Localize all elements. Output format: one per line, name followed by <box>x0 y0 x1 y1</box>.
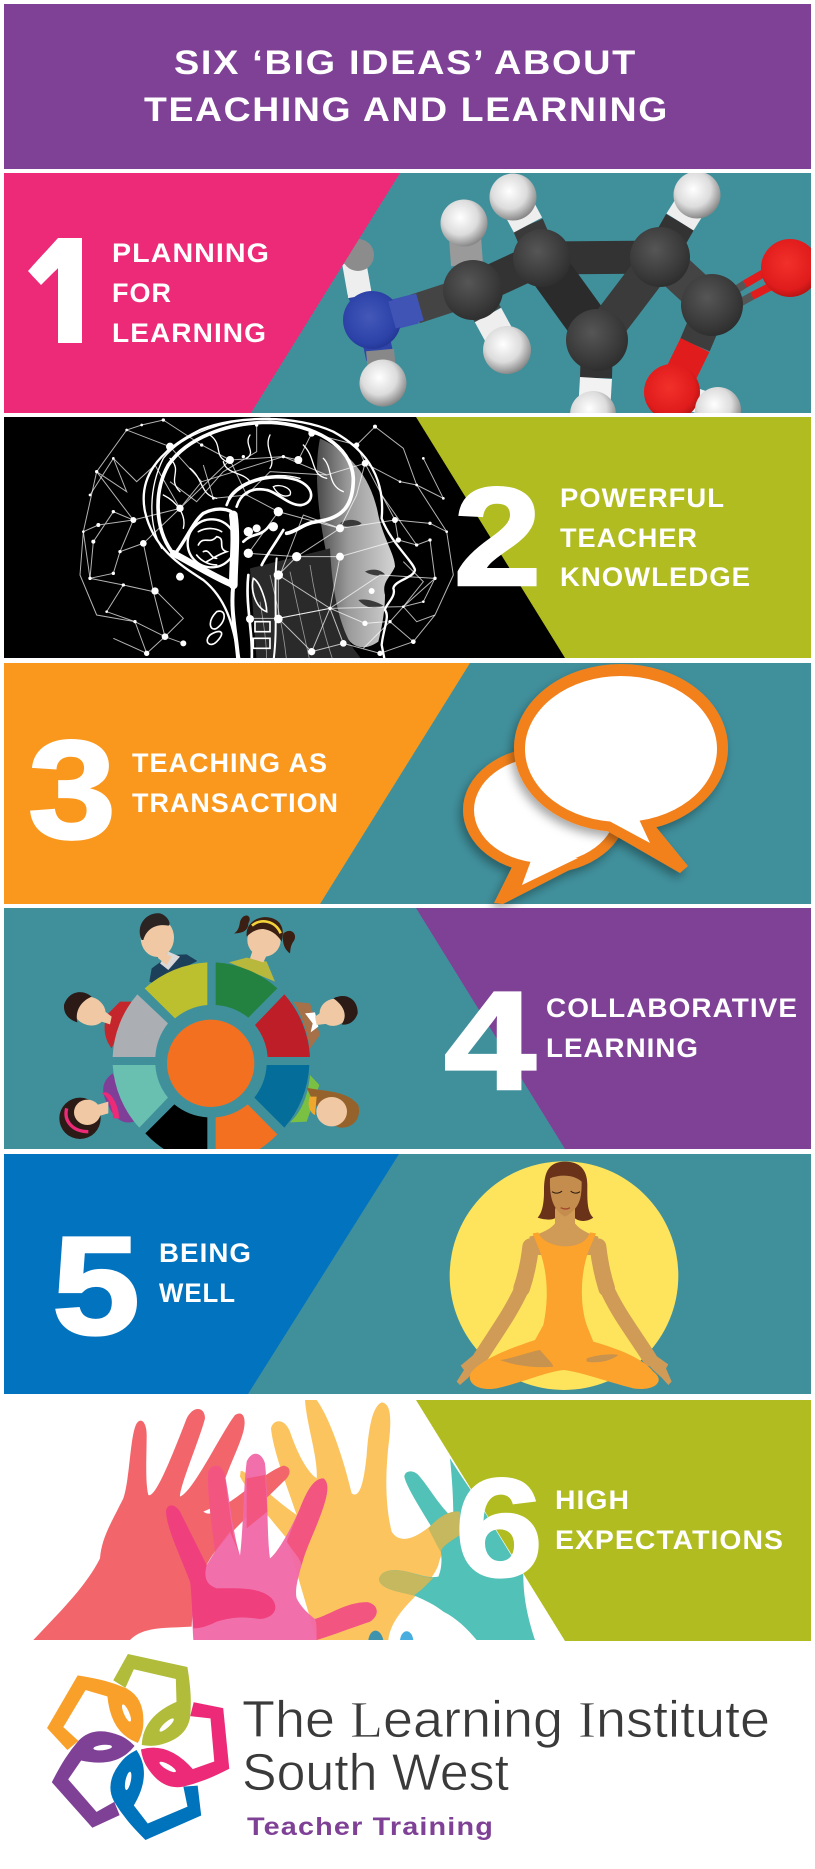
person: top left <box>140 913 197 983</box>
diagonal colour block: olive <box>416 417 811 658</box>
overlap: pink and coral <box>166 1505 275 1628</box>
label: teaching as transaction: TEACHING AS <box>132 748 328 778</box>
label: being well: BEING <box>159 1238 252 1268</box>
label: collaborative learning: LEARNING <box>546 1033 699 1063</box>
logo: the learning institute south west <box>43 1655 770 1851</box>
icon: speech bubbles <box>463 664 728 904</box>
label: powerful teacher knowledge: POWERFUL <box>560 483 725 513</box>
heading: line 1: SIX ‘BIG IDEAS’ ABOUT <box>174 44 637 82</box>
label: powerful teacher knowledge: KNOWLEDGE <box>560 562 751 592</box>
large bubble <box>514 664 728 873</box>
panel 1: planning for learning <box>4 173 811 413</box>
illustration: overlapping hands <box>33 1400 535 1640</box>
image: brain and face in network sphere <box>80 418 453 662</box>
number 4: 4 <box>444 962 536 1119</box>
number 6: 6 <box>455 1449 543 1606</box>
panel 4: collaborative learning <box>4 908 811 1165</box>
label: teaching as transaction: TRANSACTION <box>132 788 339 818</box>
logo text: teacher training: Teacher Training <box>247 1813 494 1841</box>
hand: coral <box>33 1409 290 1640</box>
diagonal colour block: purple <box>416 908 811 1149</box>
panel 5: being well <box>4 1154 811 1394</box>
heading: line 2: TEACHING AND LEARNING <box>144 91 669 129</box>
person: top right <box>229 915 295 982</box>
person: bottom right <box>290 1075 359 1128</box>
person: left <box>64 991 132 1048</box>
fingertips: bottom <box>368 1631 383 1640</box>
label: high expectations: EXPECTATIONS <box>555 1525 784 1555</box>
label: teaching as transaction <box>132 748 339 818</box>
label: planning for learning <box>112 238 270 348</box>
panel 3: teaching as transaction <box>4 663 811 904</box>
number 1 <box>28 238 82 343</box>
logo mark: five petals <box>43 1655 241 1851</box>
number 3: 3 <box>28 711 116 868</box>
table segments <box>113 962 310 1165</box>
person: bottom left <box>59 1073 134 1139</box>
small bubble <box>463 747 627 904</box>
label: planning for learning: PLANNING <box>112 238 270 268</box>
illustration: meditating woman <box>450 1161 678 1390</box>
illustration: people around a table <box>59 913 359 1165</box>
overlap: yellow and teal <box>379 1511 460 1596</box>
number 5: 5 <box>52 1207 140 1364</box>
diagonal colour block: orange <box>4 663 470 904</box>
diagonal colour block: blue <box>4 1154 399 1394</box>
label: powerful teacher knowledge: TEACHER <box>560 523 698 553</box>
label: being well <box>159 1238 252 1308</box>
number 1: 1 <box>23 216 101 373</box>
label: powerful teacher knowledge <box>560 483 751 592</box>
panel 6: high expectations <box>4 1400 811 1641</box>
label: collaborative learning <box>546 993 798 1063</box>
hand: pink <box>166 1454 377 1640</box>
panel: title banner <box>4 4 811 169</box>
label: being well: WELL <box>159 1278 236 1308</box>
number 2: 2 <box>454 458 542 615</box>
hand: yellow <box>240 1400 460 1640</box>
panel 2: powerful teacher knowledge <box>4 417 811 662</box>
logo text: organisation name line 2: South West <box>242 1744 510 1802</box>
diagonal colour block: pink <box>4 173 400 413</box>
label: high expectations <box>555 1485 784 1555</box>
hand: teal <box>379 1458 535 1640</box>
diagonal colour block: olive <box>416 1400 811 1641</box>
person: right <box>293 994 358 1048</box>
icon: molecule <box>342 173 811 413</box>
label: collaborative learning: COLLABORATIVE <box>546 993 798 1023</box>
label: planning for learning: LEARNING <box>112 318 267 348</box>
label: planning for learning: FOR <box>112 278 172 308</box>
label: high expectations: HIGH <box>555 1485 630 1515</box>
logo text: organisation name line 1: The Learning Institute <box>242 1691 770 1749</box>
